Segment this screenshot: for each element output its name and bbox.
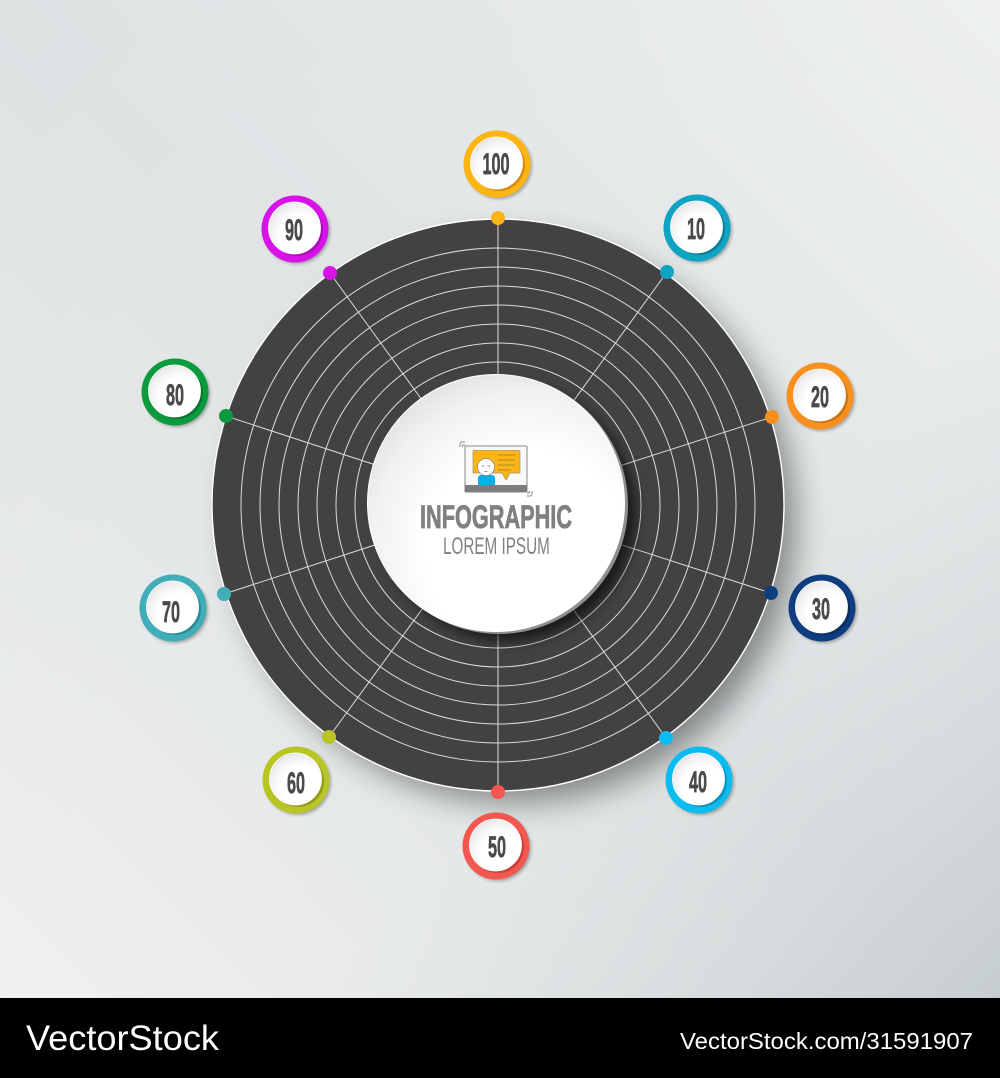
badge 50: 50 bbox=[488, 831, 506, 864]
badge 40 bbox=[666, 746, 734, 815]
badge 70: 70 bbox=[162, 596, 180, 629]
badge 10: 10 bbox=[687, 213, 705, 246]
footer logo text: VectorStock bbox=[26, 1019, 220, 1058]
footer URL and image id: VectorStock.com/31591907 bbox=[680, 1028, 973, 1054]
badge 60: 60 bbox=[287, 767, 305, 800]
footer bar bbox=[0, 998, 1000, 1078]
badge 60 bbox=[262, 746, 331, 815]
subtitle: LOREM IPSUM bbox=[443, 533, 550, 560]
radial chart disc bbox=[212, 218, 796, 803]
center circle bbox=[368, 374, 636, 641]
connector dots bbox=[217, 211, 779, 799]
badge 20 bbox=[786, 362, 855, 431]
badge 90: 90 bbox=[285, 214, 303, 247]
badge 30 bbox=[788, 574, 857, 643]
badge 40: 40 bbox=[689, 766, 707, 799]
badge 100 bbox=[464, 130, 532, 199]
badge 90 bbox=[262, 196, 330, 264]
badge 80: 80 bbox=[166, 379, 184, 412]
badge 70 bbox=[140, 574, 208, 643]
badge 50 bbox=[462, 812, 531, 881]
badge 10 bbox=[664, 194, 732, 263]
title: INFOGRAPHIC bbox=[420, 500, 572, 536]
badge 30: 30 bbox=[812, 593, 830, 626]
badge 20: 20 bbox=[811, 381, 829, 414]
icon: presenter on screen with speech bubble bbox=[460, 442, 532, 496]
badge 100: 100 bbox=[482, 148, 510, 181]
badge 80 bbox=[142, 358, 210, 427]
